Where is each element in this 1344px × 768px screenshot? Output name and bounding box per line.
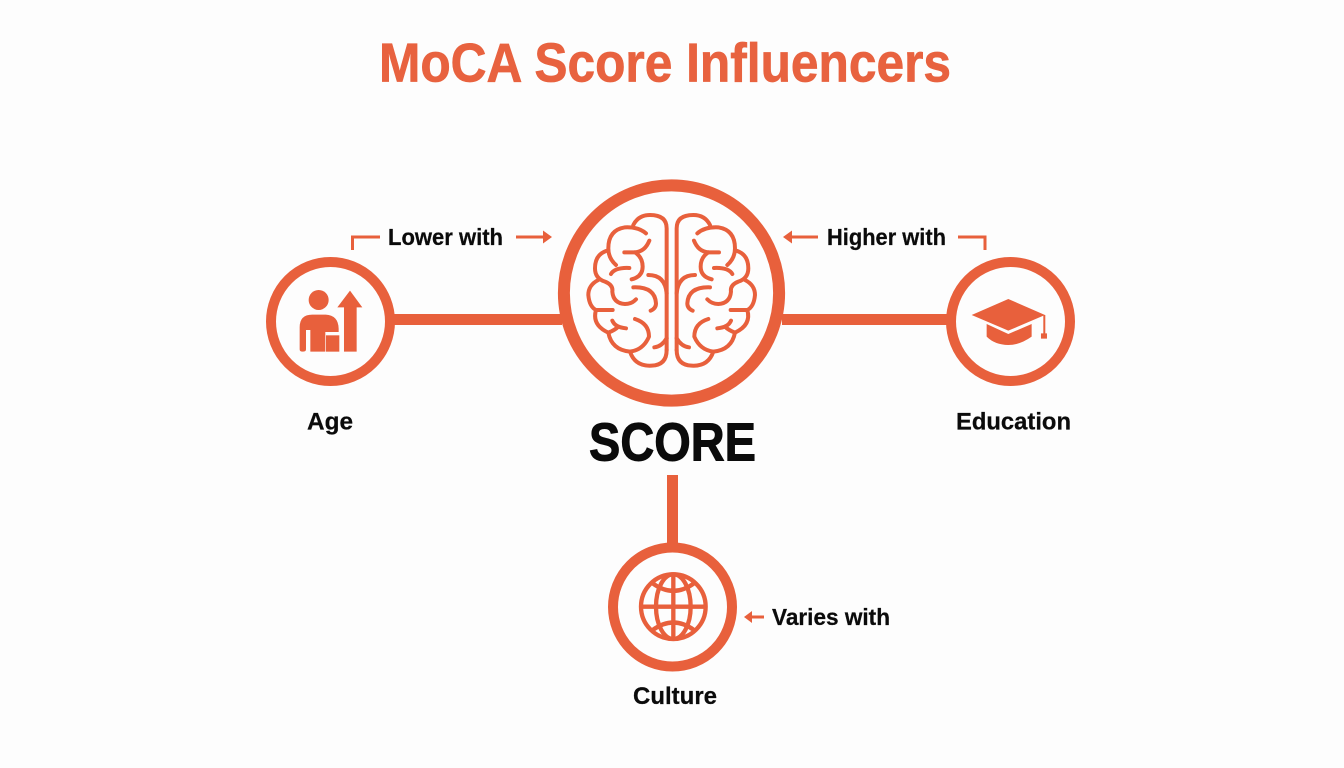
label: lower with: Lower with xyxy=(388,224,503,250)
arrow: toward score from education xyxy=(786,236,818,238)
bracket: from education xyxy=(958,237,985,250)
bracket: from age xyxy=(352,237,380,250)
connector: age to score xyxy=(392,314,562,325)
annotation: varies with xyxy=(744,604,890,630)
icon: person with rising arrow xyxy=(300,290,362,352)
label: higher with: Higher with xyxy=(827,224,946,250)
age label: Age xyxy=(307,408,353,436)
education node xyxy=(951,262,1070,381)
culture label: Culture xyxy=(633,683,717,710)
age node xyxy=(271,262,390,381)
score label: SCORE xyxy=(589,412,756,472)
icon: graduation cap xyxy=(972,299,1047,345)
icon: globe xyxy=(641,574,706,639)
icon: brain xyxy=(588,215,755,366)
central score node with brain icon xyxy=(564,185,779,401)
annotation: higher with xyxy=(783,224,985,250)
title: MoCA Score Influencers xyxy=(379,32,951,94)
arrow: toward score xyxy=(516,236,549,238)
connector: score to culture xyxy=(667,475,678,547)
annotation: lower with xyxy=(352,224,552,250)
arrow: toward culture xyxy=(747,616,764,618)
education label: Education xyxy=(956,408,1071,436)
connector: score to education xyxy=(782,314,949,325)
label: varies with: Varies with xyxy=(772,604,890,630)
culture node xyxy=(613,548,732,666)
